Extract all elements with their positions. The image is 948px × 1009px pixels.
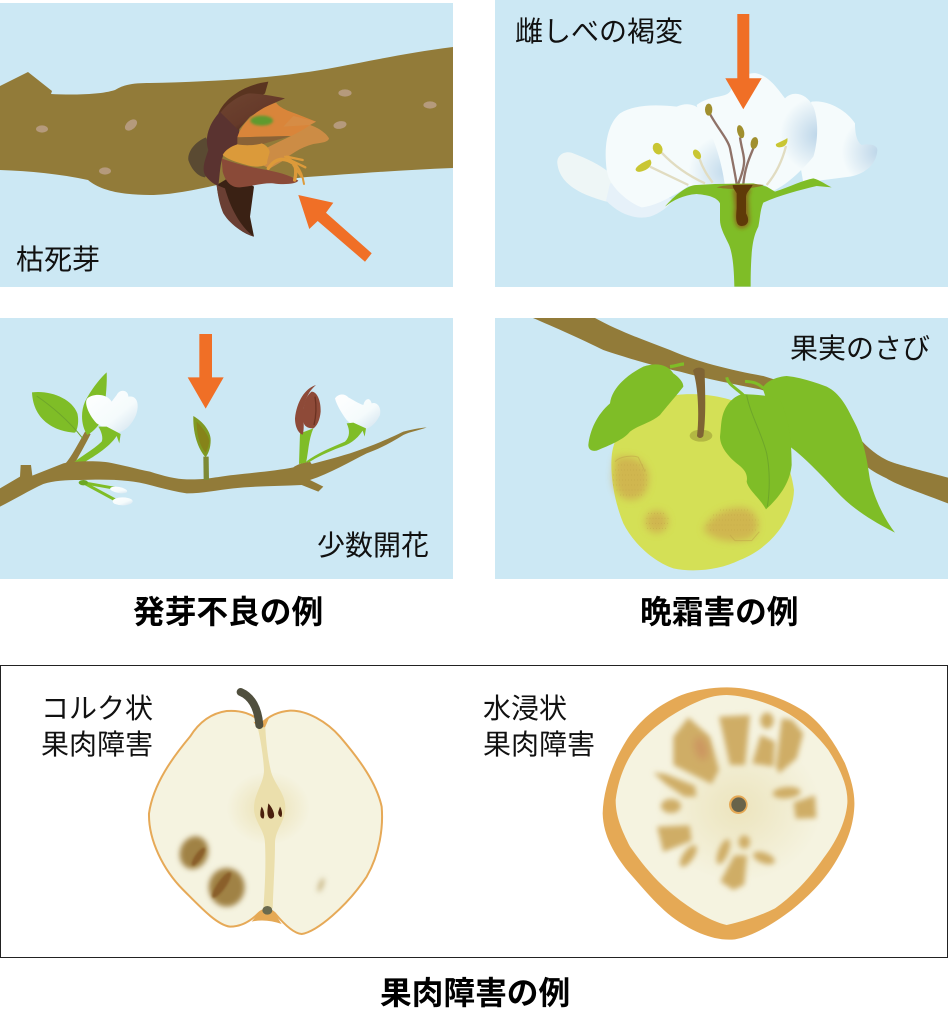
label: 枯死芽 [16,244,100,275]
panel: 果実のさび [495,318,948,579]
flower stalk left [74,426,121,462]
shoot stem [65,432,91,466]
leaf stalks [727,377,743,395]
branch [533,318,774,390]
label: コルク状果肉障害: 果肉障害 [41,729,153,760]
label: 水浸状果肉障害: 果肉障害 [483,729,595,760]
heading: 晩霜害の例: 晩霜害の例 [640,594,798,630]
leaf right front [720,394,792,509]
label: コルク状果肉障害: コルク状 [41,693,153,724]
panel: 雌しべの褐変 [495,0,948,287]
branch [0,427,427,507]
pear cross-section: 水浸状 [603,687,854,940]
brown bud [299,428,313,464]
icon: dead bud [188,82,329,237]
label: 果実のさび [790,333,930,364]
panel: 果肉障害 [0,666,948,958]
bud failed [203,457,209,480]
leaf right back [763,376,895,533]
panel: 枯死芽 [0,3,453,287]
flower [557,73,877,287]
panel: 少数開花 [0,318,453,579]
label: 雌しべの褐変 [515,16,683,47]
pear cross-section: コルク状 [149,692,382,934]
flower right [335,394,380,429]
arrow [298,195,372,262]
stamens [650,146,786,185]
heading: 発芽不良の例: 発芽不良の例 [133,594,323,630]
upper leaf [82,372,107,435]
browned pistil base [717,184,764,189]
white flower left [86,391,138,433]
flower stalks below branch [83,483,117,501]
label: 少数開花 [317,530,429,561]
damaged patches [653,713,816,890]
leaf [32,392,78,433]
label: コルク状果肉障害 [41,693,153,760]
browned spots [175,832,326,907]
bark spots [36,89,437,175]
leaf left [670,364,684,367]
pistils [710,114,753,184]
label: 水浸状果肉障害 [483,693,595,760]
receptacle [665,178,832,287]
pear [611,394,794,570]
stem [241,692,259,725]
russet patches [613,456,758,541]
branch [0,47,453,195]
label: 水浸状果肉障害: 水浸状 [483,693,567,724]
arrow [725,14,762,109]
arrow [188,334,224,409]
stem [690,430,712,442]
